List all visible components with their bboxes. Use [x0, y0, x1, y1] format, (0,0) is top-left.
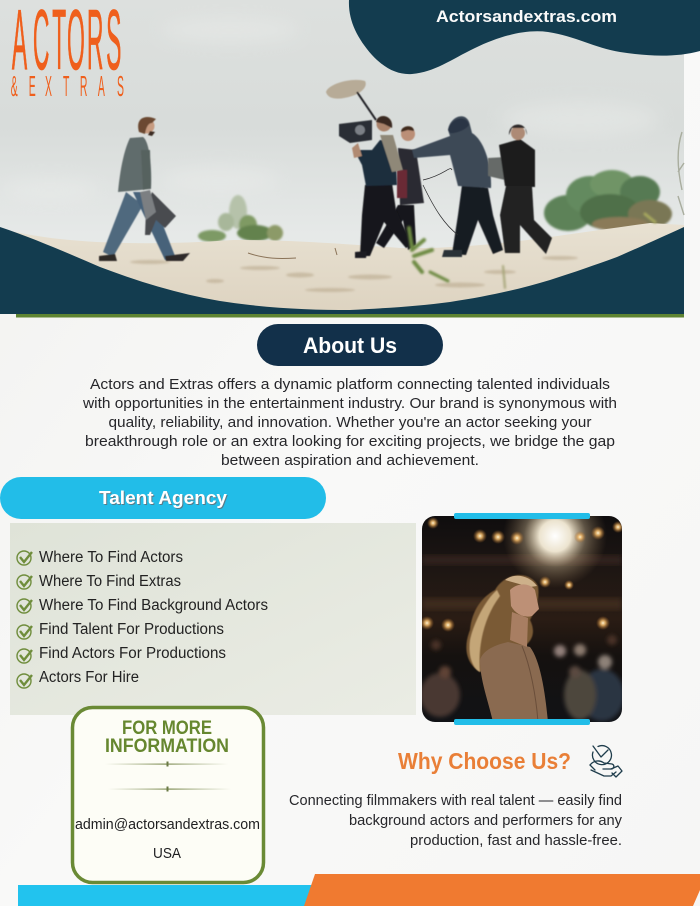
checklist item 1: Where To Find Actors — [39, 549, 183, 566]
checklist item 2: Where To Find Extras — [39, 573, 181, 590]
figure: boom microphone — [326, 80, 376, 120]
about us paragraph: between aspiration and achievement. — [221, 452, 479, 469]
woman — [466, 575, 548, 722]
photo: actress on stage — [422, 513, 622, 725]
large bush right — [544, 170, 672, 231]
sky — [0, 0, 684, 314]
why choose us text: background actors and performers for any — [349, 812, 622, 829]
checklist item 4: Find Talent For Productions — [39, 621, 224, 638]
figure: hooded crew member — [412, 116, 503, 257]
why choose us text: Connecting filmmakers with real talent — easily find — [289, 792, 622, 809]
about us paragraph: with opportunities in the entertainment industry. Our brand is synonymous with — [82, 395, 617, 412]
about us paragraph — [82, 376, 617, 469]
top cyan bar — [454, 513, 590, 519]
distant bush left — [198, 195, 283, 242]
neck and face — [510, 612, 528, 647]
sand dune — [0, 223, 684, 314]
website address: Actorsandextras.com — [436, 8, 617, 26]
ornamental dividers — [105, 764, 228, 765]
why choose us text: production, fast and hassle-free. — [410, 832, 622, 849]
about us heading: About Us — [303, 333, 397, 358]
spotlight — [506, 516, 604, 585]
about us paragraph: breakthrough role or an extra looking for exciting projects, we bridge the gap — [85, 433, 615, 450]
wave: bottom navy — [0, 227, 684, 314]
about us heading — [257, 324, 443, 366]
icon: hand with check — [590, 746, 622, 777]
bottom cyan bar — [454, 719, 590, 725]
audience — [420, 635, 624, 721]
header photo: film crew on dunes — [0, 0, 700, 318]
talent agency heading: Talent Agency — [100, 488, 229, 509]
foreground plants — [409, 214, 655, 288]
figure: camera operator — [339, 116, 412, 258]
checklist item 6: Actors For Hire — [39, 669, 139, 686]
clouds — [0, 18, 660, 202]
checklist item 3: Where To Find Background Actors — [39, 597, 268, 614]
footer cyan band — [18, 885, 313, 906]
hair — [466, 575, 538, 672]
figure: walking actor — [99, 117, 190, 261]
footer orange band — [304, 874, 700, 906]
figure: second crew member — [376, 126, 424, 250]
why choose us heading: Why Choose Us? — [398, 748, 571, 774]
contact heading: FOR MORE — [122, 718, 212, 739]
contact heading — [105, 718, 229, 757]
panel: talent agency list — [10, 523, 416, 715]
logo — [11, 0, 124, 103]
email: admin@actorsandextras.com — [75, 816, 260, 833]
blouse — [480, 642, 548, 722]
location: USA — [153, 845, 181, 862]
about us paragraph: Actors and Extras offers a dynamic platform connecting talented individuals — [90, 376, 610, 393]
wave: top right navy — [349, 0, 700, 74]
talent agency heading — [0, 477, 326, 519]
figure: crew member with headphones — [488, 124, 552, 254]
logo word: & EXTRAS: &EXTRAS — [11, 69, 124, 103]
checklist item 5: Find Actors For Productions — [39, 645, 226, 662]
green rule — [16, 314, 684, 318]
about us paragraph: quality, reliability, and innovation. Whether you're an actor seeking your — [108, 414, 592, 431]
why choose us text — [289, 792, 622, 849]
cables — [423, 169, 458, 235]
contact heading: INFORMATION — [105, 736, 229, 757]
stage lamps — [420, 517, 624, 632]
talent agency heading: Talent Agency — [99, 487, 228, 508]
balcony bands — [422, 555, 622, 565]
contact box — [72, 708, 264, 882]
sand marks — [130, 256, 578, 292]
dry plant at right edge — [678, 132, 684, 215]
